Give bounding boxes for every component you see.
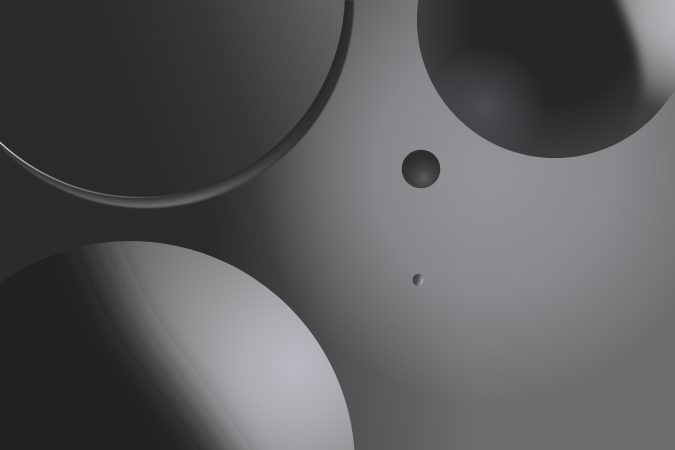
large sphere, bottom left	[0, 241, 354, 450]
sphere shadow	[0, 242, 262, 450]
bright rim edge	[0, 0, 346, 198]
small crater	[402, 150, 440, 188]
tiny sphere	[413, 274, 423, 286]
lit crater wall	[612, 0, 675, 110]
large crater with rim	[0, 0, 360, 210]
crater rim	[0, 0, 360, 210]
top right crater	[417, 0, 675, 158]
crater floor	[0, 0, 345, 197]
